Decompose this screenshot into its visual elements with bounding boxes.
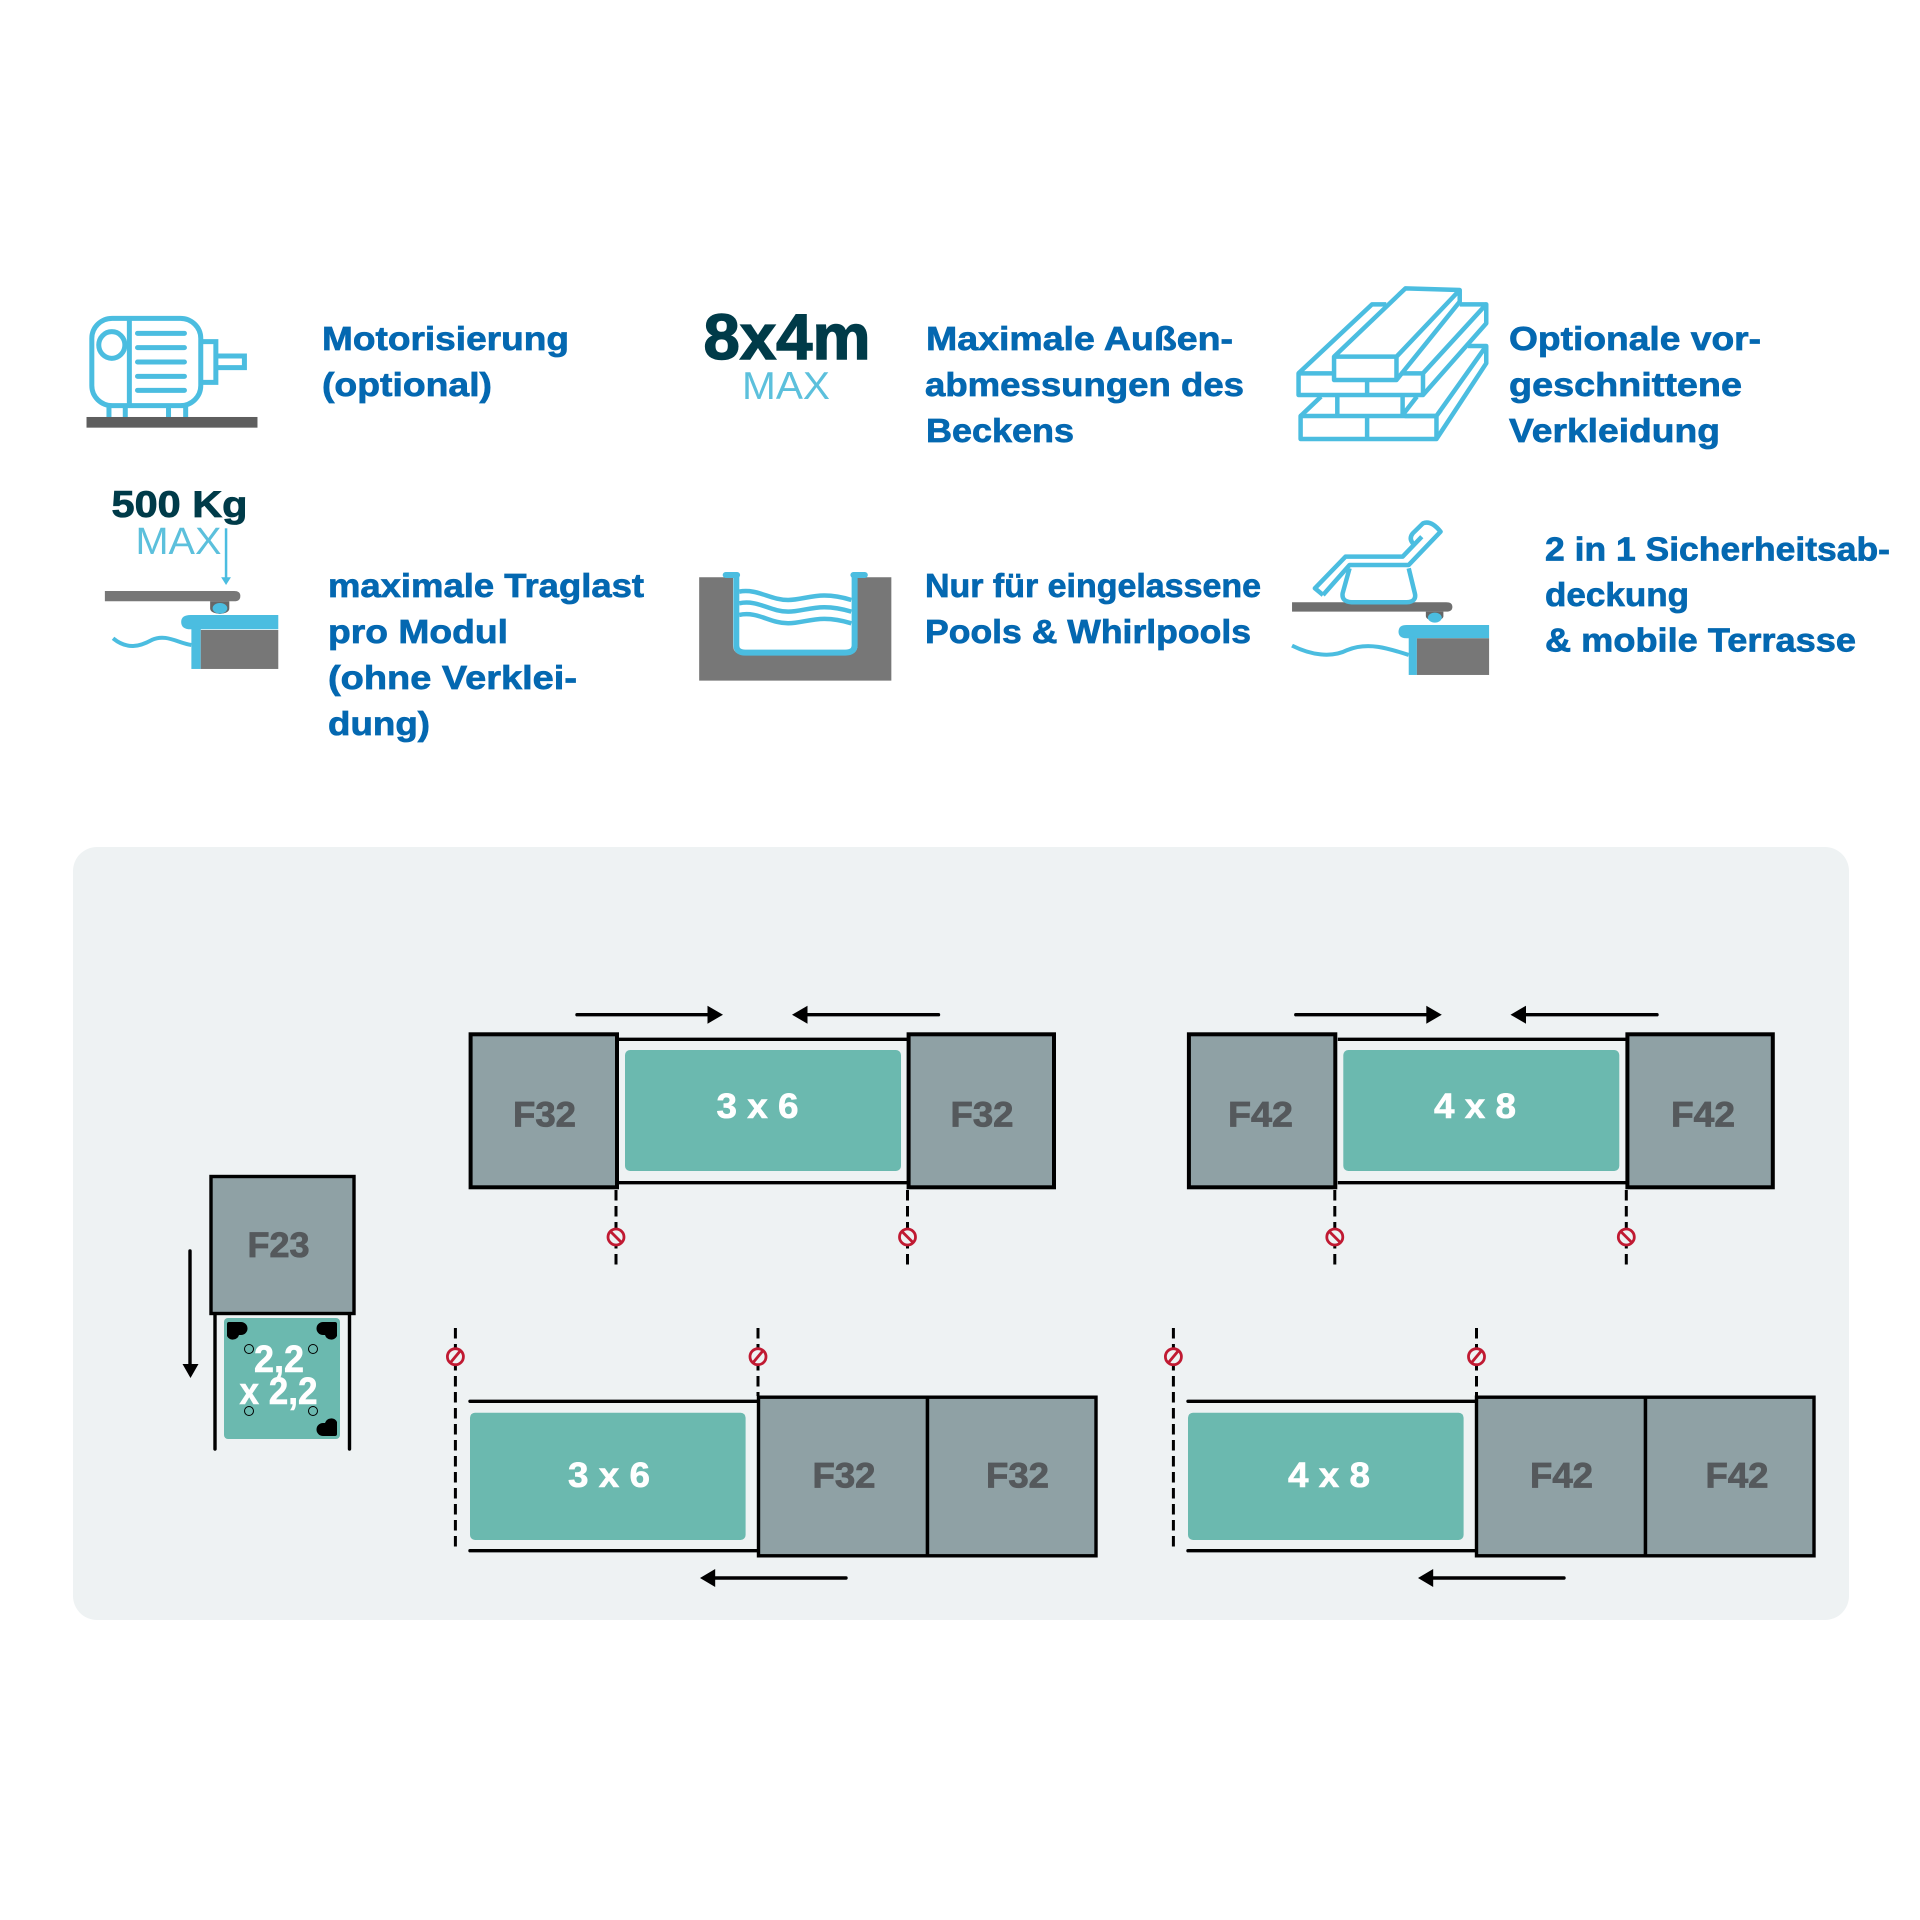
- text: maximale traglast: maximale Traglast: [328, 567, 644, 604]
- text: maximale traglast: pro Modul: [328, 613, 508, 650]
- diagram: F42 pair closing on 4 x 8: F42: [1228, 1096, 1293, 1134]
- icon: 8x4m max: 8x4m: [704, 301, 870, 373]
- diagram: F42 pair closing on 4 x 8: 4 x 8: [1434, 1087, 1516, 1126]
- diagram: F42 stacked beside 4 x 8: [1165, 1328, 1814, 1587]
- text: motorisierung: [322, 320, 569, 403]
- icon: 8x4m max: MAX: [742, 365, 830, 408]
- diagram: F23 module: [182, 1176, 354, 1449]
- diagram: F23 module: 2,2: [254, 1339, 304, 1381]
- diagram: F32 stacked beside 3 x 6: [447, 1328, 1096, 1587]
- icon: 8x4m max: [704, 301, 870, 408]
- diagram: F32 pair closing on 3 x 6: 3 x 6: [716, 1087, 798, 1126]
- feature: inground pools only: [699, 567, 1261, 681]
- text: maximale traglast: (ohne Verklei-: [328, 659, 577, 696]
- feature: pre-cut cladding: [1299, 288, 1761, 449]
- text: optionale verkleidung: Verkleidung: [1509, 412, 1720, 449]
- feature: motorisation: [87, 318, 569, 428]
- diagram: F32 pair closing on 3 x 6: F32: [950, 1096, 1014, 1134]
- diagram: F42 stacked beside 4 x 8: F42: [1706, 1456, 1768, 1496]
- icon: lumber stack: [1299, 288, 1486, 439]
- diagram: F32 stacked beside 3 x 6: 3 x 6: [568, 1456, 650, 1495]
- text: maximale aussenabmessungen: [925, 320, 1244, 449]
- text: maximale traglast: dung): [328, 705, 430, 742]
- icon: 500 kg load on cover: 500 Kg: [112, 484, 248, 525]
- diagram: F32 stacked beside 3 x 6: F32: [812, 1456, 876, 1496]
- diagram: F23 module: F23: [248, 1226, 310, 1265]
- icon: 500 kg load on cover: MAX: [136, 521, 222, 563]
- text: maximale aussenabmessungen: Maximale Außen-: [926, 320, 1233, 357]
- diagram: F42 pair closing on 4 x 8: [1189, 1006, 1773, 1265]
- diagram: F32 stacked beside 3 x 6: F32: [986, 1456, 1049, 1496]
- text: maximale aussenabmessungen: Beckens: [926, 412, 1074, 449]
- text: optionale verkleidung: Optionale vor-: [1509, 320, 1761, 357]
- text: nur fuer eingelassene pools: Nur für eingelassene: [925, 567, 1261, 604]
- diagram: F42 pair closing on 4 x 8: F42: [1671, 1096, 1735, 1134]
- feature: maximum load: [105, 484, 644, 742]
- text: nur fuer eingelassene pools: [925, 567, 1261, 650]
- icon: 500 kg load on cover: [105, 484, 278, 669]
- icon: inground pool: [699, 575, 891, 681]
- text: sicherheitsabdeckung: & mobile Terrasse: [1545, 622, 1856, 658]
- icon: lounge chair on cover: [1292, 523, 1489, 675]
- panel background: [73, 847, 1849, 1620]
- text: sicherheitsabdeckung: [1545, 530, 1890, 658]
- text: optionale verkleidung: geschnittene: [1509, 366, 1742, 403]
- diagram: F32 pair closing on 3 x 6: [471, 1006, 1054, 1265]
- text: motorisierung: (optional): [322, 366, 492, 403]
- icon: motor: [87, 318, 257, 428]
- feature: maximum size: [704, 301, 1244, 449]
- text: maximale aussenabmessungen: abmessungen des: [925, 366, 1244, 403]
- diagram: F23 module: x 2,2: [240, 1371, 318, 1413]
- text: nur fuer eingelassene pools: Pools & Whirlpools: [925, 613, 1251, 650]
- feature: safety cover and terrace: [1292, 523, 1890, 675]
- text: optionale verkleidung: [1509, 320, 1761, 449]
- text: sicherheitsabdeckung: 2 in 1 Sicherheitsab-: [1545, 530, 1890, 568]
- text: sicherheitsabdeckung: deckung: [1545, 576, 1689, 613]
- diagram: F42 stacked beside 4 x 8: F42: [1530, 1456, 1593, 1496]
- diagram: F32 pair closing on 3 x 6: F32: [513, 1096, 576, 1134]
- text: maximale traglast: [328, 567, 644, 742]
- text: motorisierung: Motorisierung: [322, 320, 569, 357]
- panel: module diagrams: [73, 847, 1849, 1620]
- diagram: F42 stacked beside 4 x 8: 4 x 8: [1288, 1456, 1370, 1495]
